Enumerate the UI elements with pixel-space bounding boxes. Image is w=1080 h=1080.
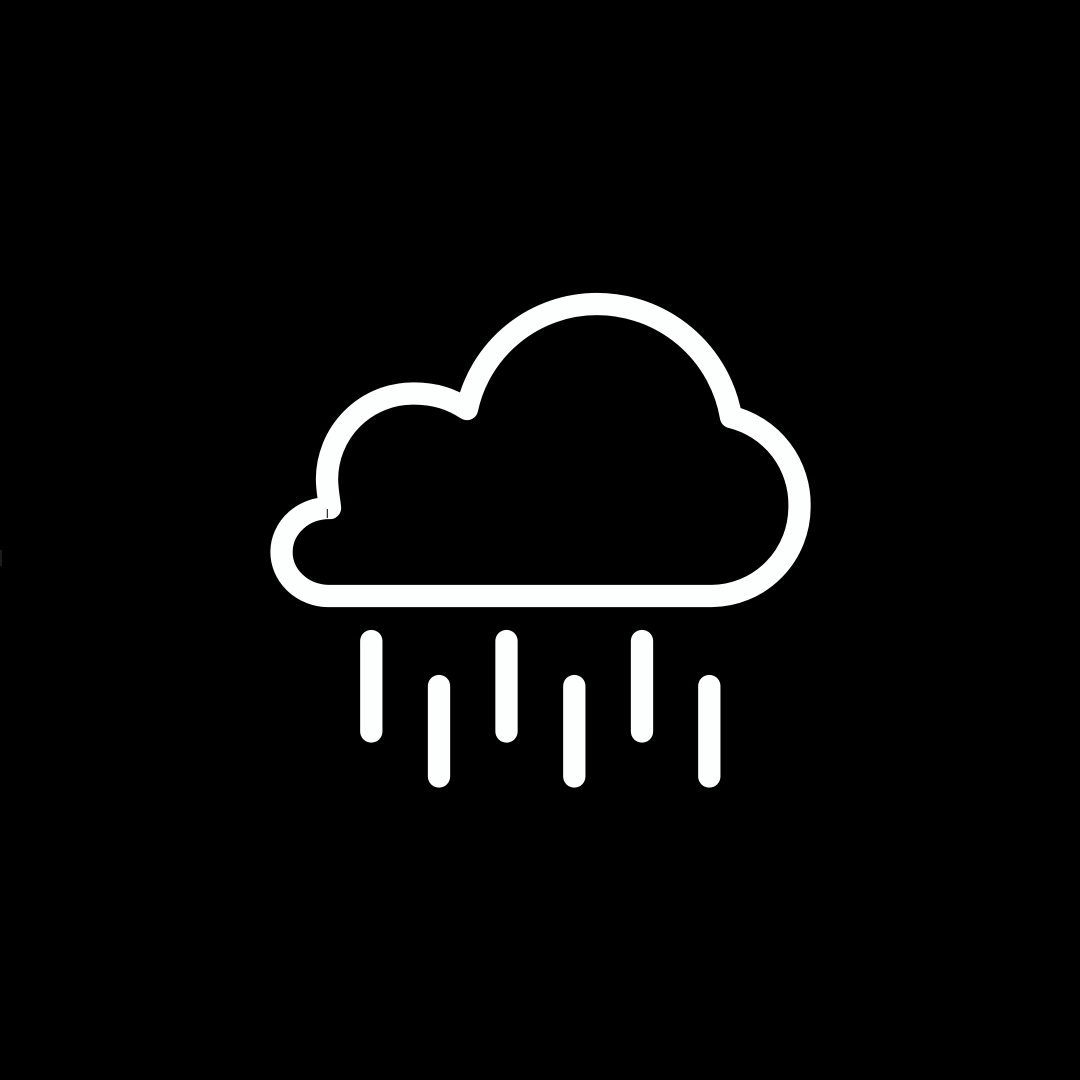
icon: seam notch in cloud outline [326,509,328,518]
icon: cloud outline [282,304,800,596]
icon: rain drops [371,641,709,776]
